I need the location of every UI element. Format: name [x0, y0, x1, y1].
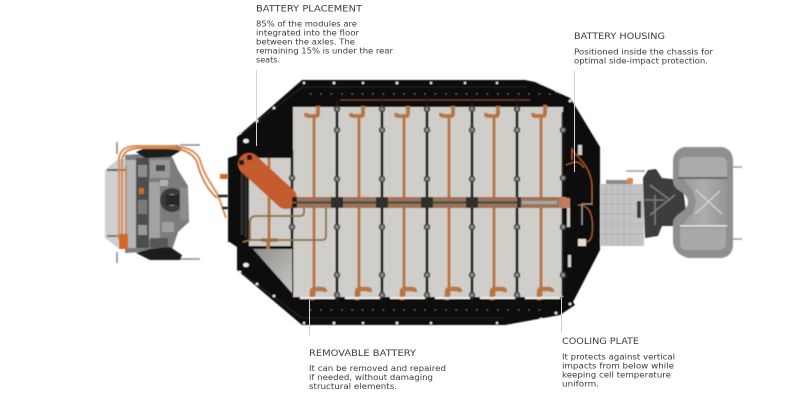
rear drive unit: [600, 147, 742, 258]
gearbox pins: [626, 167, 742, 239]
orange cooling plate: [249, 164, 286, 198]
motor mottled parts: [138, 160, 174, 235]
orange connectors: [119, 234, 128, 249]
front motor unit: [105, 142, 228, 263]
motor stubs: [218, 196, 228, 208]
chassis frame: [228, 80, 600, 325]
body: battery placement: remaining 15% is under the rear: [256, 46, 394, 56]
body: removable battery: structural elements.: [309, 381, 397, 391]
lower cells: [293, 208, 563, 297]
rear side rail: [228, 158, 241, 242]
callout: removable battery: [309, 349, 446, 391]
gearbox: [643, 169, 686, 238]
body: cooling plate: It protects against vertical: [562, 352, 675, 362]
body: battery placement: seats.: [256, 54, 280, 64]
inverter box: [600, 184, 644, 246]
copper rail top: [340, 99, 530, 101]
body: cooling plate: keeping cell temperature: [562, 370, 671, 380]
body: cooling plate: impacts from below while: [562, 360, 674, 370]
heading: cooling plate: COOLING PLATE: [562, 337, 639, 347]
electronics white parts: [567, 145, 586, 267]
plate ports: [239, 155, 297, 208]
callout: battery housing: [574, 32, 714, 66]
frame bolts: [239, 82, 571, 324]
motor side plate: [105, 159, 130, 248]
rear section cells: [249, 158, 292, 246]
motor cables: [119, 146, 226, 240]
central spine: [295, 197, 566, 208]
rear corner plate: [253, 249, 292, 293]
body: cooling plate: [562, 352, 675, 388]
white module end strips: [300, 297, 560, 299]
motor brackets: [136, 145, 182, 158]
body: battery housing: optimal side-impact protection.: [574, 56, 708, 66]
body: battery placement: [256, 18, 394, 64]
right electronics bay: [566, 148, 592, 242]
module dividers: [292, 100, 563, 303]
body: removable battery: It can be removed and repaired: [309, 363, 446, 373]
battery modules: [249, 100, 566, 303]
motor pins: [117, 142, 200, 263]
tank: [673, 147, 733, 258]
body: cooling plate: uniform.: [562, 378, 599, 388]
heading: battery placement: BATTERY PLACEMENT: [256, 4, 363, 14]
body: battery housing: Positioned inside the chassis for: [574, 46, 714, 56]
callout: cooling plate: [562, 337, 675, 388]
body: battery housing: [574, 46, 714, 66]
frame small rivets: [310, 94, 560, 310]
orange connector: [627, 178, 633, 184]
coolant pipes: [243, 208, 326, 242]
body: battery placement: integrated into the floor: [256, 28, 360, 38]
leader lines: [256, 70, 574, 336]
battery pack: [228, 80, 600, 325]
heading: removable battery: REMOVABLE BATTERY: [309, 349, 417, 359]
body: removable battery: [309, 363, 446, 391]
heading: battery housing: BATTERY HOUSING: [574, 32, 665, 42]
body: battery placement: 85% of the modules are: [256, 18, 357, 28]
motor body: [125, 152, 189, 253]
rear corner black block: [272, 118, 292, 157]
frame highlight: [240, 87, 527, 318]
upper cells: [293, 107, 563, 197]
body: removable battery: if needed, without damaging: [309, 372, 433, 382]
copper busbars: [261, 105, 552, 300]
rear wiring: [242, 168, 246, 238]
divider bolts: [289, 106, 566, 298]
callout: battery placement: [256, 4, 394, 64]
body: battery placement: between the axles. The: [256, 36, 355, 46]
X emblem: [695, 190, 722, 214]
